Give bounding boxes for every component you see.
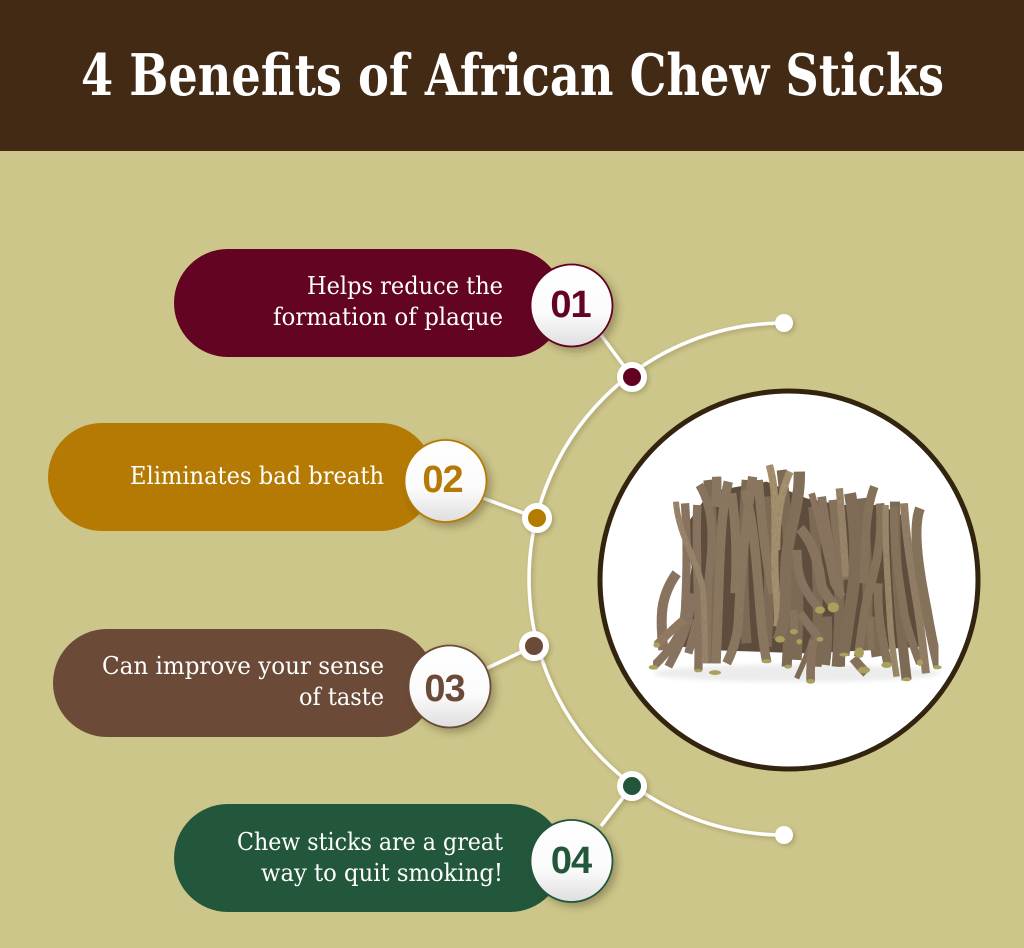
- title banner: [0, 0, 1024, 151]
- badge 04: 04: [551, 840, 592, 882]
- end dot: bottom: [775, 826, 793, 844]
- text 4: Chew sticks are a great: [237, 827, 503, 856]
- arc timeline with connectors: [480, 323, 784, 835]
- text 2: Eliminates bad breath: [130, 461, 384, 490]
- item 3: [53, 629, 549, 737]
- badge 02: [404, 440, 486, 522]
- badge 04: [530, 820, 612, 902]
- item 2: [48, 423, 552, 533]
- photo: bundle of sticks: [649, 465, 942, 684]
- node 1: [617, 362, 647, 392]
- badge 03: [408, 646, 490, 728]
- pill 1: [174, 249, 564, 357]
- end dot: top: [775, 314, 793, 332]
- text 3: [102, 651, 384, 711]
- text 3: Can improve your sense: [102, 651, 384, 680]
- node 3: [519, 631, 549, 661]
- pill 3: [53, 629, 435, 737]
- pill 2: [48, 423, 434, 531]
- text 1: formation of plaque: [273, 302, 503, 331]
- pill 4: [174, 804, 564, 912]
- badge 02: 02: [422, 459, 463, 501]
- image circle: chew sticks: [600, 391, 978, 769]
- item 4: [174, 771, 647, 912]
- item 1: [174, 249, 647, 392]
- text 4: [237, 827, 503, 887]
- node 4: [617, 771, 647, 801]
- stick tips: [649, 602, 942, 684]
- text 1: Helps reduce the: [307, 271, 503, 300]
- text 1: [273, 271, 503, 331]
- badge 01: 01: [550, 284, 591, 326]
- node 2: [522, 503, 552, 533]
- text 4: way to quit smoking!: [261, 858, 503, 887]
- badge 01: [530, 264, 612, 346]
- badge 03: 03: [424, 668, 465, 710]
- text 3: of taste: [299, 682, 384, 711]
